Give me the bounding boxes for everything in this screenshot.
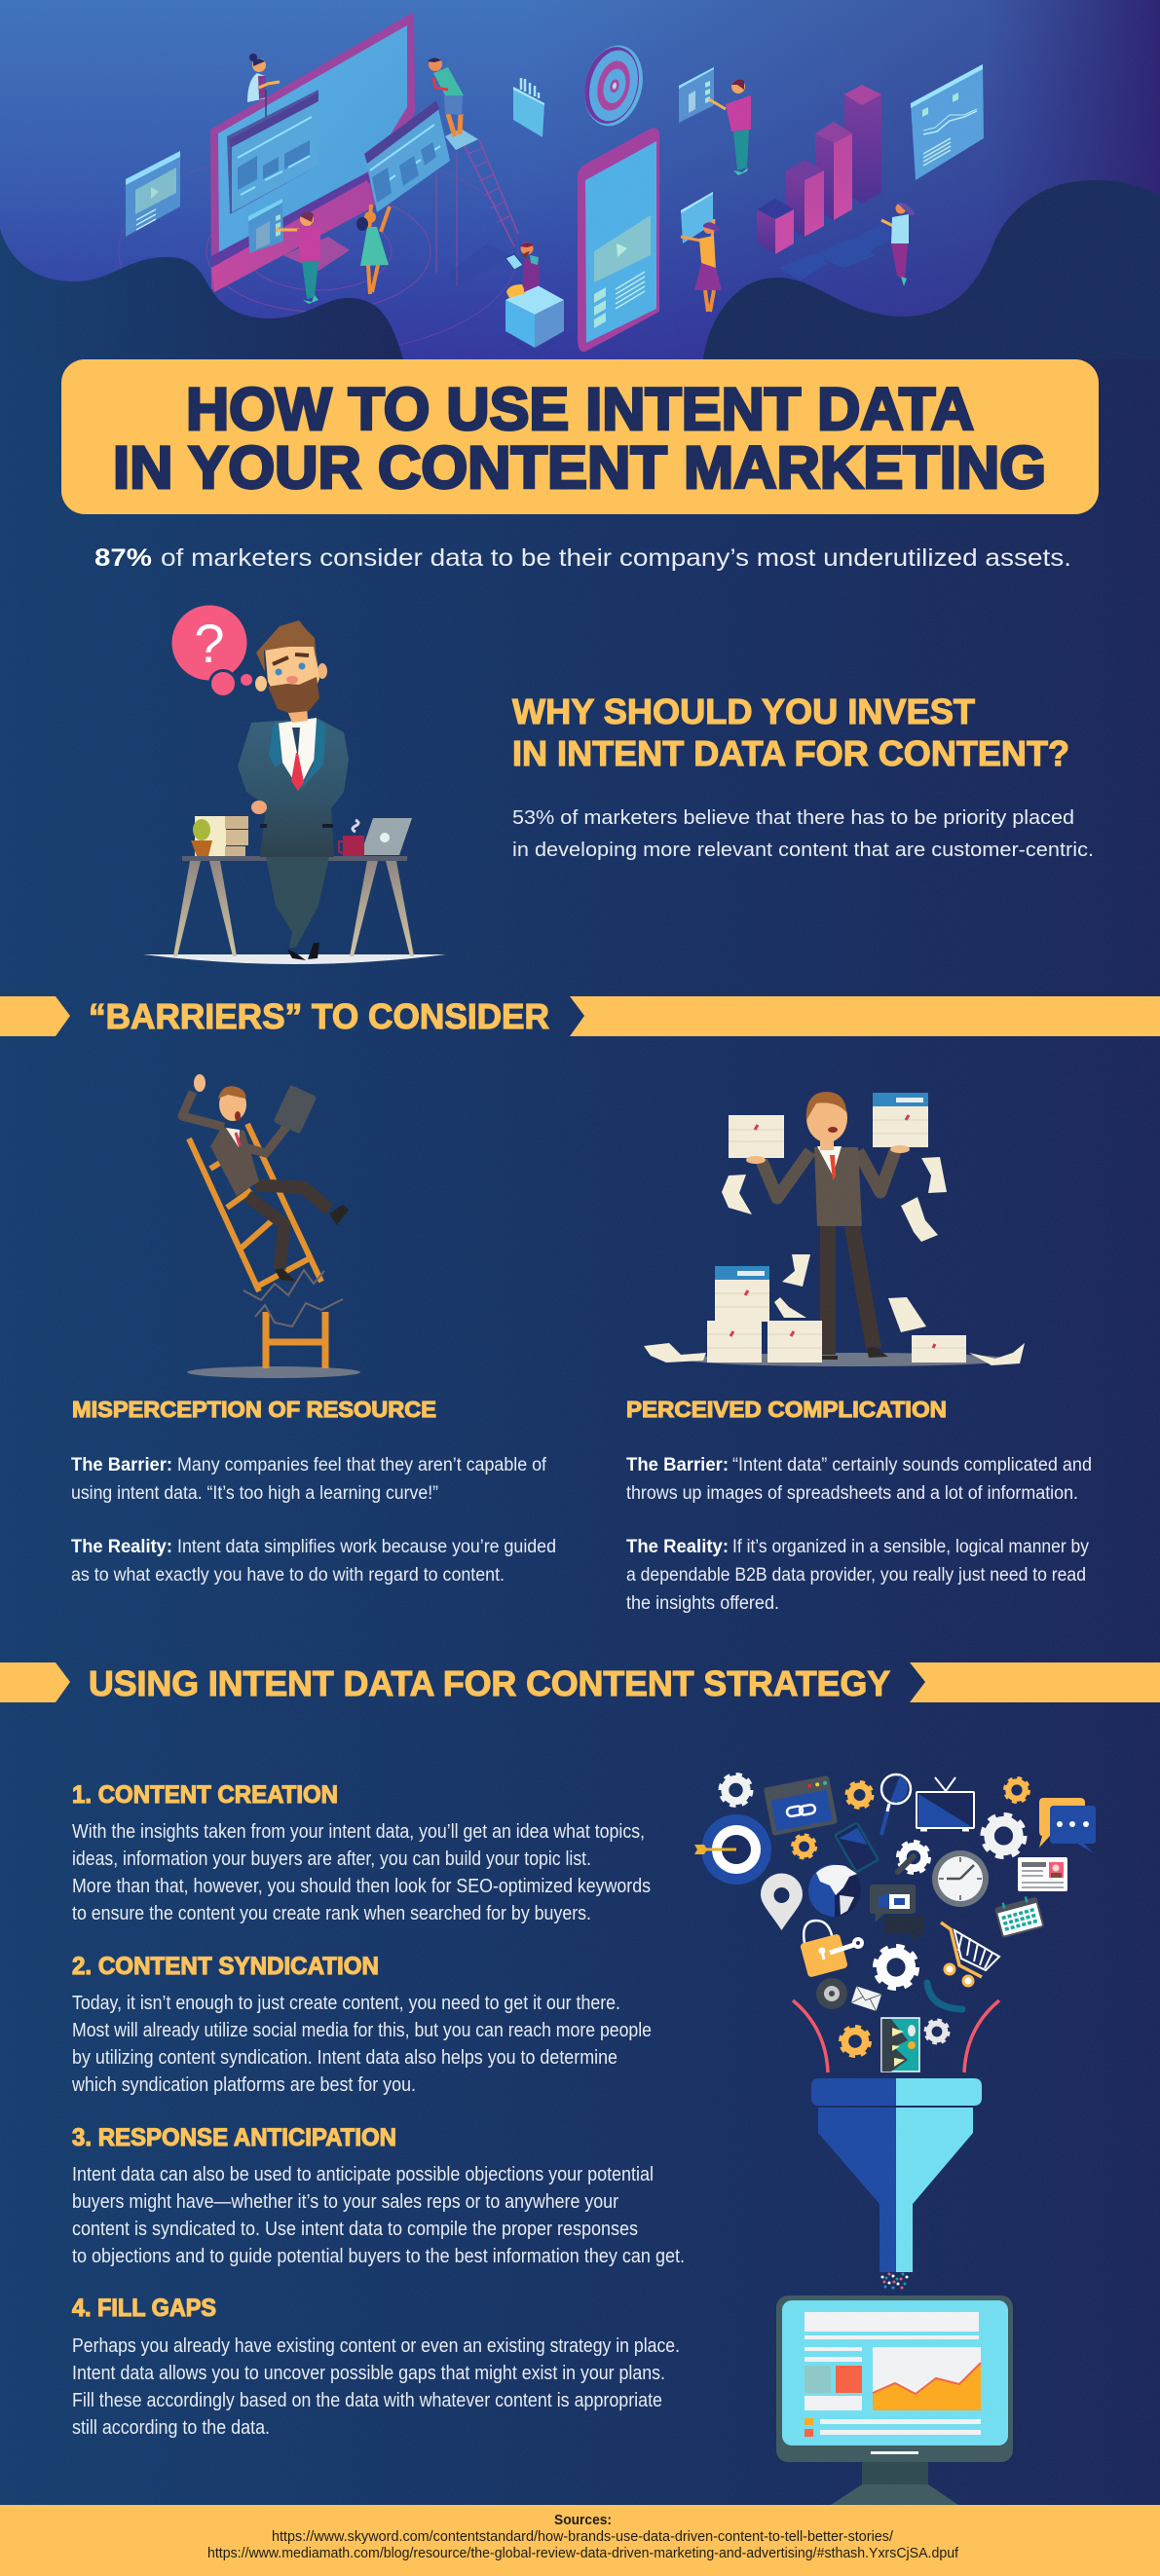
woman at top of monitor xyxy=(247,54,280,117)
barrier text xyxy=(626,1455,1092,1504)
reality text: The Reality: xyxy=(626,1537,729,1557)
ladder xyxy=(189,1124,325,1368)
subtitle statistic: 87% xyxy=(94,544,152,572)
step 4 text: still according to the data. xyxy=(72,2417,270,2439)
floor highlight xyxy=(143,954,446,964)
sources text xyxy=(207,2513,959,2561)
icon: smartphone xyxy=(835,1822,879,1872)
title text xyxy=(113,376,1046,501)
small screen card xyxy=(248,199,283,253)
step 4 text: Intent data allows you to uncover possible gaps that might exist in your plans. xyxy=(72,2363,665,2384)
bullseye target xyxy=(577,39,651,132)
step 1 text: With the insights taken from your intent data, you’ll get an idea what topics, xyxy=(72,1821,645,1843)
shoes xyxy=(287,943,319,960)
paragraph: why invest: in developing more relevant content that are customer-centric. xyxy=(512,840,1094,861)
bar chart xyxy=(757,85,901,280)
icon: television xyxy=(917,1777,974,1830)
reality text: a dependable B2B data provider, you really just need to read xyxy=(626,1565,1086,1586)
right data card xyxy=(911,64,984,180)
icon: chat bubbles xyxy=(1039,1798,1096,1853)
step 1 text: More than that, however, you should then look for SEO-optimized keywords xyxy=(72,1876,651,1897)
banner heading text: “BARRIERS” TO CONSIDER xyxy=(89,996,549,1036)
barrier text: The Barrier: xyxy=(71,1455,172,1475)
icon: large monitor xyxy=(210,12,415,292)
section heading: why invest: IN INTENT DATA FOR CONTENT? xyxy=(512,733,1069,773)
businessman xyxy=(762,1092,895,1360)
sources text: Sources: xyxy=(554,2513,612,2528)
title banner xyxy=(61,359,1099,514)
icon: gear and wrench xyxy=(898,1843,928,1872)
illustration: man falling off broken ladder xyxy=(182,1074,360,1378)
thought bubble xyxy=(171,606,252,698)
barrier text: throws up images of spreadsheets and a lot of information. xyxy=(626,1483,1078,1504)
icon: browser link xyxy=(764,1775,838,1836)
barrier text xyxy=(71,1455,547,1504)
hero illustration xyxy=(0,0,1160,359)
step 2 text: by utilizing content syndication. Intent data also helps you to determine xyxy=(72,2047,617,2069)
funnel arcs xyxy=(793,2000,999,2072)
sources text: https://www.skyword.com/contentstandard/how-brands-use-data-driven-content-to-tell-better-stories/ xyxy=(272,2529,894,2545)
step 3: response anticipation: 3. RESPONSE ANTICIPATION xyxy=(72,2124,396,2151)
tall smartphone xyxy=(578,128,659,352)
desktop monitor xyxy=(776,2296,1013,2505)
step 2 text: Today, it isn’t enough to just create content, you need to get it our there. xyxy=(72,1993,620,2014)
icon: speech video boxes xyxy=(870,1885,924,1943)
title text: HOW TO USE INTENT DATA xyxy=(186,376,974,442)
step 4: fill gaps: 4. FILL GAPS xyxy=(72,2295,216,2322)
icon: id card xyxy=(1018,1857,1067,1891)
monitor area chart xyxy=(873,2347,981,2410)
shirt and tie xyxy=(269,718,326,791)
icon: calendar xyxy=(994,1894,1043,1937)
icon: left video card xyxy=(126,151,180,237)
step 4 text xyxy=(72,2335,680,2439)
step 3 text: buyers might have—whether it’s to your sales reps or to anywhere your xyxy=(72,2191,618,2213)
section heading: why invest xyxy=(512,691,1069,773)
step 1 text: ideas, information your buyers are after, you can build your topic list. xyxy=(72,1848,591,1870)
icon cluster above funnel xyxy=(694,1774,1096,2072)
step 1: content creation: 1. CONTENT CREATION xyxy=(72,1781,338,1809)
man in magenta top right xyxy=(709,80,751,175)
icon: location pin xyxy=(761,1874,803,1930)
woman on the right xyxy=(881,203,915,286)
icon: target with arrow xyxy=(694,1814,771,1885)
falling businessman xyxy=(182,1074,349,1282)
hands xyxy=(746,1145,910,1164)
step 3: response anticipation xyxy=(72,2124,685,2267)
thought bubble: ? xyxy=(194,613,225,674)
reality text: If it’s organized in a sensible, logical manner by xyxy=(732,1537,1089,1557)
icon: picture xyxy=(881,2018,919,2072)
icon: lock and key xyxy=(800,1921,864,1978)
funnel xyxy=(811,2078,982,2272)
step 2: content syndication xyxy=(71,1953,652,2096)
step 2 text: which syndication platforms are best for you. xyxy=(71,2074,416,2096)
step 2 text: Most will already utilize social media for this, but you can reach more people xyxy=(72,2020,652,2041)
barrier text: “Intent data” certainly sounds complicated and xyxy=(732,1455,1092,1475)
icon: globe xyxy=(808,1864,861,1917)
floating card top right xyxy=(679,67,714,123)
suit trousers xyxy=(266,857,329,948)
monitor interface panel xyxy=(227,90,318,214)
paragraph: why invest xyxy=(512,807,1094,861)
head xyxy=(255,620,327,723)
desk xyxy=(173,856,414,956)
icon: monitor stand xyxy=(282,237,350,271)
paper stack and cactus xyxy=(191,816,248,856)
column: misperception of resource xyxy=(71,1397,556,1586)
reality text xyxy=(626,1537,1089,1614)
sources text: https://www.mediamath.com/blog/resource/the-global-review-data-driven-marketing-and-advertising/#sthash.YxrsCjSA.dpuf xyxy=(207,2546,959,2561)
step 4: fill gaps xyxy=(72,2295,680,2439)
step 4 text: Fill these accordingly based on the data with whatever content is appropriate xyxy=(72,2390,662,2411)
teal-shirted person on platform xyxy=(428,57,518,285)
loose papers xyxy=(644,1157,1025,1365)
document stacks xyxy=(707,1106,966,1363)
step 4 text: Perhaps you already have existing content or even an existing strategy in place. xyxy=(72,2335,680,2357)
step 3 text xyxy=(72,2164,685,2267)
banner: barriers to consider xyxy=(0,996,1160,1036)
icon: envelope xyxy=(851,1986,881,2011)
illustration: man overwhelmed by paperwork xyxy=(644,1092,1025,1366)
icon: gears xyxy=(721,1775,1029,2056)
reality text xyxy=(71,1537,556,1586)
step 1 text: to ensure the content you create rank when searched for by buyers. xyxy=(72,1903,591,1924)
banner: using intent data xyxy=(0,1662,1160,1703)
step 3 text: Intent data can also be used to anticipate possible objections your potential xyxy=(72,2164,654,2185)
floating interface panel xyxy=(364,100,450,212)
wave shape: right xyxy=(703,180,1160,359)
footer sources xyxy=(0,2505,1160,2576)
step 2 text xyxy=(71,1993,652,2096)
title text: IN YOUR CONTENT MARKETING xyxy=(113,434,1046,501)
step 2: content syndication: 2. CONTENT SYNDICATION xyxy=(72,1953,379,1980)
barrier text: Many companies feel that they aren’t capable of xyxy=(177,1455,547,1475)
icon: telephone xyxy=(927,1983,962,2009)
icon: shopping cart xyxy=(941,1923,999,1986)
icon: magnifier xyxy=(881,1774,911,1835)
coffee mug and laptop xyxy=(339,818,412,856)
woman in orange xyxy=(681,192,722,312)
subtitle statistic: of marketers consider data to be their company’s most underutilized assets. xyxy=(161,544,1071,572)
wave shape: left xyxy=(0,229,403,359)
column: perceived complication xyxy=(626,1397,1092,1614)
paragraph: why invest: 53% of marketers believe that there has to be priority placed xyxy=(512,807,1074,829)
reality text: Intent data simplifies work because you’re guided xyxy=(177,1537,556,1557)
illustration: thinking businessman at desk xyxy=(143,606,446,964)
hand and pockets xyxy=(251,801,333,826)
step 3 text: content is syndicated to. Use intent data to compile the proper responses xyxy=(72,2219,638,2240)
person on cube xyxy=(505,242,564,358)
floating chart card xyxy=(513,78,544,137)
banner heading text: USING INTENT DATA FOR CONTENT STRATEGY xyxy=(89,1663,890,1703)
barrier text: using intent data. “It’s too high a learning curve!” xyxy=(71,1483,438,1504)
man in magenta xyxy=(276,211,320,304)
icon: clock xyxy=(932,1850,989,1907)
particles dropping from funnel xyxy=(880,2273,908,2289)
section heading: why invest: WHY SHOULD YOU INVEST xyxy=(512,691,975,731)
woman in teal dress xyxy=(356,205,390,294)
suit jacket xyxy=(238,719,349,857)
step 1: content creation xyxy=(72,1781,651,1924)
reality text: as to what exactly you have to do with regard to content. xyxy=(71,1565,505,1586)
icon: disc xyxy=(816,1978,847,2009)
reality text: The Reality: xyxy=(71,1537,172,1557)
step 1 text xyxy=(72,1821,651,1924)
floor rings xyxy=(119,149,518,354)
reality text: the insights offered. xyxy=(626,1593,779,1614)
subheading: PERCEIVED COMPLICATION xyxy=(626,1397,947,1422)
subheading: MISPERCEPTION OF RESOURCE xyxy=(72,1397,436,1422)
barrier text: The Barrier: xyxy=(626,1455,729,1475)
step 3 text: to objections and to guide potential buyers to the best information they can get. xyxy=(72,2246,685,2267)
